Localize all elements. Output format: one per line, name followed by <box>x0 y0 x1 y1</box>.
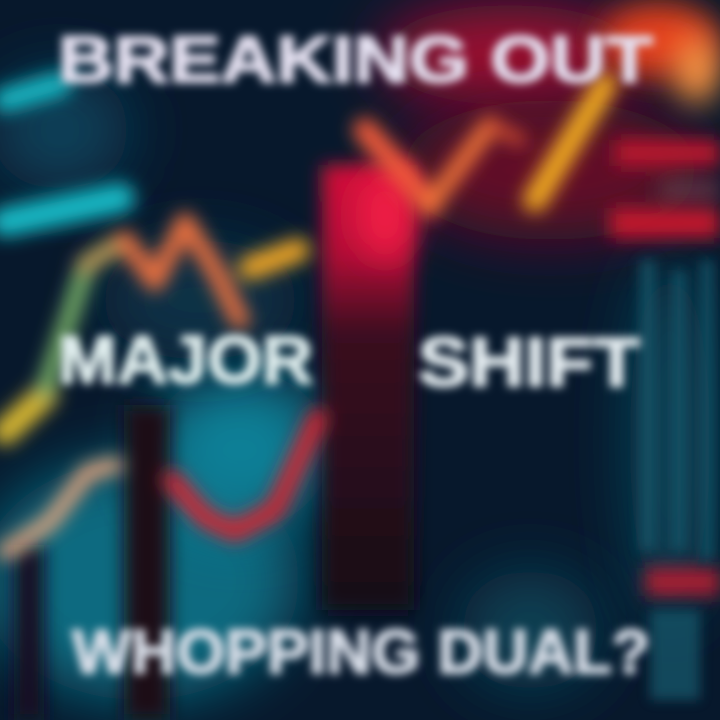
title: middle heading right: SHIFT <box>418 323 640 401</box>
multicolour line chart <box>5 222 298 432</box>
cyan strokes <box>5 84 120 222</box>
right-side grid columns <box>640 260 714 700</box>
red line chart <box>172 418 318 532</box>
title: bottom heading: WHOPPING DUAL? <box>72 618 650 687</box>
red stripes right <box>610 140 720 596</box>
pale orange line chart <box>5 465 115 552</box>
red glow top right <box>380 2 720 240</box>
rising orange line chart <box>365 85 605 205</box>
title: middle heading left: MAJOR <box>58 322 313 398</box>
dark column left <box>14 545 44 720</box>
dark column middle <box>124 405 170 720</box>
central red column <box>322 165 415 610</box>
title: top heading: BREAKING OUT <box>58 22 653 96</box>
